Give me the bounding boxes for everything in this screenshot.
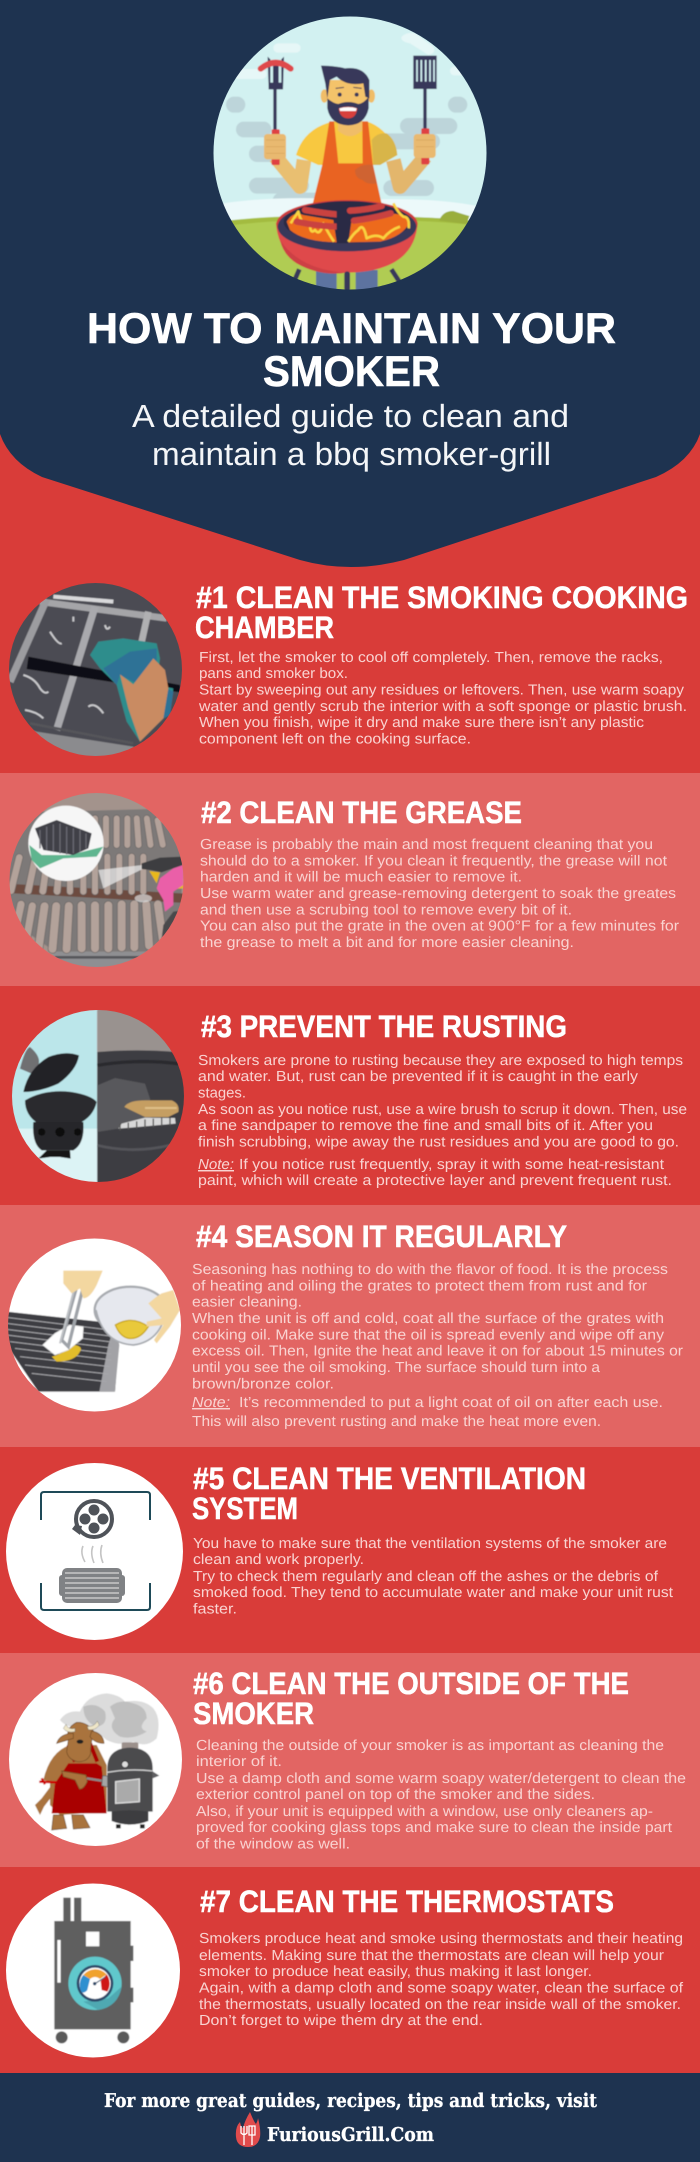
body text: Also, if your unit is equipped with a window, use only cleaners ap- (196, 1804, 653, 1820)
body text: exterior control panel on top of the smoker and the sides. (196, 1787, 595, 1803)
heading: #6 CLEAN THE OUTSIDE OF THE (193, 1666, 629, 1701)
body text: Cleaning the outside of your smoker is as important as cleaning the (196, 1738, 664, 1754)
body text: elements. Making sure that the thermostats are clean will help your (199, 1948, 664, 1964)
body text: First, let the smoker to cool off completely. Then, remove the racks, (199, 650, 663, 666)
panel: step 1 (7, 580, 688, 762)
body text: and then use a scrubing tool to remove every bit of it. (200, 902, 572, 918)
body text: When the unit is off and cold, coat all the surface of the grates with (192, 1311, 664, 1327)
note: If you notice rust frequently, spray it with some heat-resistant (239, 1157, 664, 1173)
panel: header (0, 0, 700, 567)
body text (193, 1536, 673, 1618)
heading: #7 CLEAN THE THERMOSTATS (200, 1884, 614, 1919)
body text: You have to make sure that the ventilation systems of the smoker are (193, 1536, 667, 1552)
body text: brown/bronze color. (192, 1376, 334, 1392)
body text: a fine sandpaper to remove the fine and small bits of it. After you (198, 1118, 653, 1134)
body text: of heating and oiling the grates to protect them from rust and for (192, 1278, 647, 1294)
heading: #2 CLEAN THE GREASE (201, 795, 522, 830)
icon: ventilation fan and vent (6, 1463, 183, 1640)
body text (192, 1262, 683, 1392)
body text: harden and it will be much easier to remove it. (200, 870, 522, 886)
body text: You can also put the grate in the oven at 900°F for a few minutes for (200, 919, 679, 935)
note: Note: (192, 1395, 230, 1411)
heading: SYSTEM (192, 1491, 298, 1526)
title (87, 305, 616, 396)
body text: interior of it. (196, 1754, 282, 1770)
icon: flame logo (236, 2112, 260, 2147)
body text (198, 1053, 687, 1150)
body text: until you see the oil smoking. The surface should turn into a (192, 1360, 601, 1376)
body text: Again, with a damp cloth and some soapy water, clean the surface of (199, 1980, 684, 1996)
heading: CHAMBER (195, 610, 334, 645)
body text: water and gently scrub the interior with a soft sponge or plastic brush. (198, 699, 687, 715)
note: Note: (198, 1157, 234, 1173)
body text: stages. (198, 1086, 246, 1102)
footer call to action: For more great guides, recipes, tips and tricks, visit (104, 2090, 597, 2112)
heading: #4 SEASON IT REGULARLY (196, 1219, 567, 1254)
title: HOW TO MAINTAIN YOUR (87, 305, 616, 353)
body text: Start by sweeping out any residues or leftovers. Then, use warm soapy (199, 682, 685, 698)
heading (192, 1461, 586, 1526)
body text: Grease is probably the main and most frequent cleaning that you (200, 837, 653, 853)
panel: step 3 (8, 1009, 687, 1189)
body text: excess oil. Then, Ignite the heat and leave it on for about 15 minutes or (192, 1344, 683, 1360)
panel: step 7 (2, 1878, 684, 2062)
note (192, 1395, 663, 1430)
icon: cow with smoker (9, 1673, 182, 1846)
body text: and water. But, rust can be prevented if it is caught in the early (198, 1069, 639, 1085)
icon: man grilling sausages (210, 13, 490, 300)
body text: Smokers are prone to rusting because they are exposed to high temps (198, 1053, 683, 1069)
subtitle (132, 398, 569, 472)
panel: step 2 (0, 773, 700, 986)
body text: Don’t forget to wipe them dry at the end. (199, 2013, 483, 2029)
body text: Smokers produce heat and smoke using thermostats and their heating (199, 1931, 683, 1947)
body text: As soon as you notice rust, use a wire brush to scrup it down. Then, use (198, 1102, 687, 1118)
body text: of the window as well. (196, 1836, 350, 1852)
body text: easier cleaning. (192, 1295, 302, 1311)
body text: pans and smoker box. (199, 666, 348, 682)
note: This will also prevent rusting and make the heat more even. (192, 1414, 601, 1430)
icon: oiling grate with tongs (8, 1238, 181, 1412)
body text: the grease to melt a bit and for more easier cleaning. (200, 935, 574, 951)
heading: #5 CLEAN THE VENTILATION (193, 1461, 586, 1496)
body text: Use warm water and grease-removing detergent to soak the greates (200, 886, 676, 902)
panel: footer (0, 2073, 700, 2162)
heading: #3 PREVENT THE RUSTING (201, 1009, 567, 1044)
subtitle: A detailed guide to clean and (132, 398, 569, 434)
note (198, 1157, 672, 1189)
website name: FuriousGrill.Com (267, 2124, 434, 2146)
body text (200, 837, 679, 951)
body text: cooking oil. Make sure that the oil is spread evenly and wipe off any (192, 1327, 665, 1343)
body text: faster. (193, 1602, 237, 1618)
body text (196, 1738, 686, 1852)
body text: finish scrubbing, wipe away the rust residues and you are good to go. (198, 1134, 679, 1150)
panel: step 4 (0, 1205, 700, 1447)
icon: grate with brush and spray (7, 792, 187, 972)
panel: step 6 (0, 1653, 700, 1867)
body text: clean and work properly. (193, 1552, 364, 1568)
heading (195, 580, 688, 645)
heading (193, 1666, 629, 1731)
body text: Seasoning has nothing to do with the flavor of food. It is the process (192, 1262, 668, 1278)
body text: the thermostats, usually located on the rear inside wall of the smoker. (199, 1997, 681, 2013)
panel: step 5 (6, 1461, 673, 1640)
body text: Use a damp cloth and some warm soapy water/detergent to clean the (196, 1771, 686, 1787)
body text: should do to a smoker. If you clean it frequently, the grease will not (200, 853, 667, 869)
body text: smoked food. They tend to accumulate water and make your unit rust (193, 1585, 673, 1601)
body text: When you finish, wipe it dry and make sure there isn’t any plastic (199, 715, 644, 731)
note: paint, which will create a protective layer and prevent frequent rust. (198, 1173, 672, 1189)
icon: smoker and wire brush (8, 1009, 192, 1185)
icon: cloth wiping grate (7, 582, 183, 762)
body text (199, 1931, 684, 2029)
body text: proved for cooking glass tops and make sure to clean the inside part (196, 1820, 672, 1836)
body text: smoker to produce heat easily, thus making it last longer. (199, 1964, 592, 1980)
heading: SMOKER (193, 1696, 314, 1731)
title: SMOKER (263, 348, 440, 396)
icon: smoker with thermostat (2, 1878, 185, 2062)
body text: component left on the cooking surface. (199, 732, 471, 748)
subtitle: maintain a bbq smoker-grill (152, 436, 551, 472)
body text: Try to check them regularly and clean off the ashes or the debris of (193, 1569, 659, 1585)
note: It’s recommended to put a light coat of oil on after each use. (239, 1395, 663, 1411)
body text (198, 650, 687, 748)
